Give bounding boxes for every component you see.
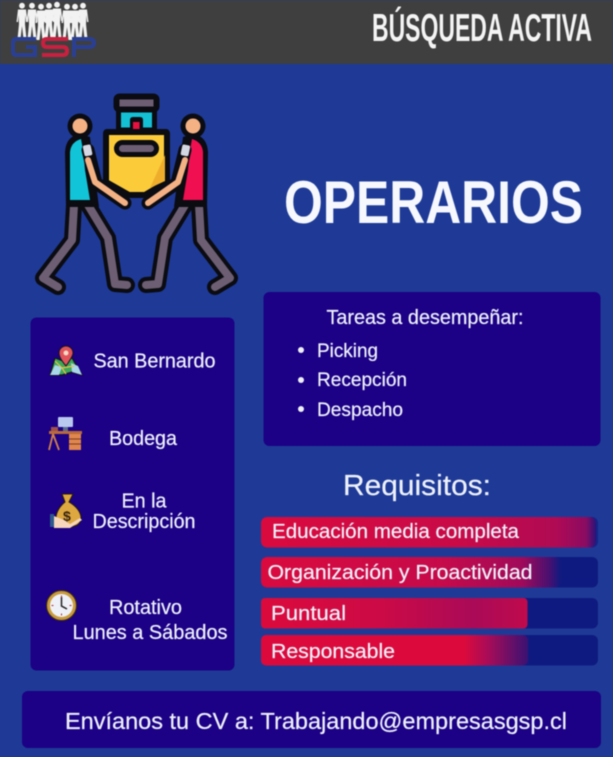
footer: contact: Envíanos tu CV a: Trabajando@empresasgsp.cl xyxy=(65,708,567,734)
label: Bodega: Bodega xyxy=(109,428,178,450)
worker: teal shirt xyxy=(43,114,127,287)
header bar xyxy=(0,0,613,64)
heading: Tareas a desempeñar: Tareas a desempeñar: xyxy=(326,307,524,329)
task list: Picking xyxy=(317,340,378,362)
package xyxy=(106,96,167,195)
bar: Organización y Proactividad xyxy=(261,557,598,588)
panel: tareas xyxy=(264,292,600,446)
bar: Educación media completa: Educación media completa xyxy=(272,520,520,543)
bar: Puntual xyxy=(261,598,598,628)
footer: contact xyxy=(22,691,601,748)
icon: money bag in hand xyxy=(50,494,82,528)
task list: Recepción xyxy=(317,369,407,391)
requirements bars xyxy=(261,517,598,666)
worker: red shirt xyxy=(146,114,230,287)
label: Rotativo Lunes a Sábados: Rotativo xyxy=(109,597,182,619)
task list xyxy=(298,340,407,421)
heading: Requisitos: Requisitos: xyxy=(343,470,491,502)
label: Rotativo Lunes a Sábados: Lunes a Sábados xyxy=(72,622,228,644)
panel: details xyxy=(30,318,234,670)
bar: Educación media completa xyxy=(261,517,598,548)
bar: Organización y Proactividad: Organización y Proactividad xyxy=(268,561,532,584)
icon: map pin xyxy=(50,346,82,375)
logo: GSP xyxy=(13,2,94,57)
label: En la Descripción xyxy=(92,490,196,533)
label: En la Descripción: En la xyxy=(122,490,167,512)
label: En la Descripción: Descripción xyxy=(92,511,196,533)
icon: desk xyxy=(49,417,82,450)
bar: Responsable xyxy=(261,635,598,666)
icon: clock xyxy=(46,590,76,620)
task list: Despacho xyxy=(317,399,403,421)
bar: Responsable: Responsable xyxy=(271,640,395,663)
bar: Puntual: Puntual xyxy=(271,602,346,625)
label: Rotativo Lunes a Sábados xyxy=(72,597,228,644)
label: San Bernardo: San Bernardo xyxy=(94,350,216,372)
illustration: two workers carrying a package xyxy=(43,96,230,287)
icon: money bag in hand: $ xyxy=(63,508,71,524)
